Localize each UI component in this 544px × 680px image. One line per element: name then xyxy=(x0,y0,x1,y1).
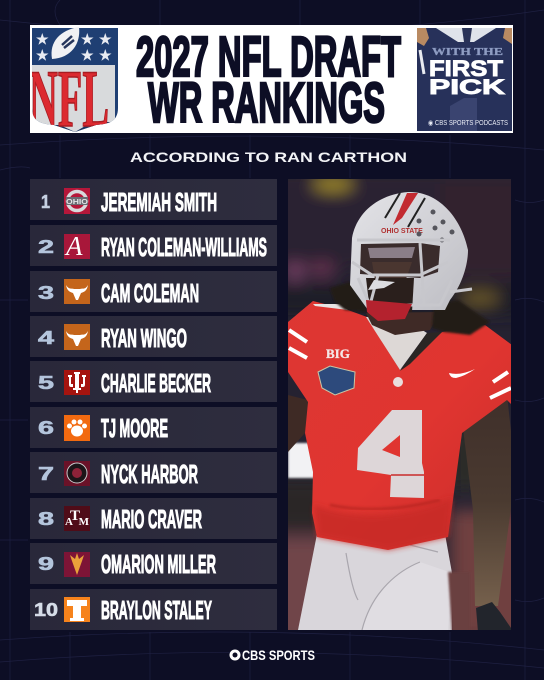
header banner xyxy=(29,25,513,144)
row 5: Charlie Becker xyxy=(30,361,277,402)
icon: NFL shield logo: ★ xyxy=(99,31,112,47)
podcast art: With the First Pick: ◉ CBS SPORTS PODCASTS xyxy=(428,120,508,127)
row 5: Charlie Becker: 5 xyxy=(38,373,54,393)
row 4: Ryan Wingo: 4 xyxy=(38,328,54,348)
icon: Indiana logo xyxy=(64,370,90,395)
row 4: Ryan Wingo xyxy=(30,316,277,357)
rankings list xyxy=(30,179,277,630)
row 1: Jeremiah Smith xyxy=(30,179,277,220)
row 9: Omarion Miller xyxy=(30,543,277,584)
dreadlocks xyxy=(330,282,490,335)
icon: Texas A&M logo: T xyxy=(70,508,80,524)
jersey patches xyxy=(318,346,475,395)
icon: Arizona State logo xyxy=(64,552,90,577)
player jersey xyxy=(288,301,512,550)
row 4: Ryan Wingo: RYAN WINGO xyxy=(101,323,187,353)
podcast art: With the First Pick: PICK xyxy=(429,76,505,99)
row 6: TJ Moore: 6 xyxy=(38,418,54,438)
row 8: Mario Craver: MARIO CRAVER xyxy=(101,504,202,534)
glove xyxy=(476,602,511,632)
footer: CBS Sports logo: CBS SPORTS xyxy=(242,648,315,663)
icon: Alabama logo xyxy=(64,231,90,261)
row 8: Mario Craver: 8 xyxy=(38,509,54,529)
title xyxy=(136,25,401,135)
helmet xyxy=(350,192,472,321)
row 3: Cam Coleman: CAM COLEMAN xyxy=(101,278,199,308)
row 1: Jeremiah Smith: 1 xyxy=(41,192,50,212)
icon: Clemson logo xyxy=(64,415,90,441)
icon: NFL shield logo: ★ xyxy=(81,31,94,47)
jersey number 4 xyxy=(357,410,424,498)
row 7: Nyck Harbor: NYCK HARBOR xyxy=(101,459,198,489)
icon: Tennessee logo xyxy=(64,597,90,622)
icon: Ohio State logo: OHIO xyxy=(66,199,89,206)
helmet: OHIO STATE xyxy=(381,228,423,235)
icon: NFL shield logo: ★ xyxy=(36,47,49,63)
icon: Texas A&M logo: A M xyxy=(65,516,90,528)
row 6: TJ Moore xyxy=(30,407,277,448)
row 1: Jeremiah Smith: JEREMIAH SMITH xyxy=(101,187,217,217)
icon: NFL shield logo: NFL xyxy=(29,53,109,144)
subtitle: ACCORDING TO RAN CARTHON xyxy=(130,149,407,165)
row 9: Omarion Miller: 9 xyxy=(38,554,54,574)
podcast art: With the First Pick xyxy=(417,28,512,131)
row 6: TJ Moore: TJ MOORE xyxy=(101,413,168,443)
icon: Texas A&M logo xyxy=(64,506,90,531)
row 2: Ryan Coleman-Williams: 2 xyxy=(38,237,54,257)
podcast art: With the First Pick: WITH THE xyxy=(432,46,503,58)
row 2: Ryan Coleman-Williams: RYAN COLEMAN-WILLIAMS xyxy=(101,232,267,262)
player arms xyxy=(288,395,512,606)
row 9: Omarion Miller: OMARION MILLER xyxy=(101,549,216,579)
icon: Texas logo xyxy=(64,279,90,304)
row 3: Cam Coleman: 3 xyxy=(38,283,54,303)
photo background crowd xyxy=(288,179,511,630)
row 3: Cam Coleman xyxy=(30,271,277,312)
podcast art: With the First Pick: FIRST xyxy=(429,56,504,81)
row 8: Mario Craver xyxy=(30,498,277,539)
undershirt and neck xyxy=(366,316,427,370)
icon: NFL shield logo: ★ xyxy=(99,47,112,63)
row 5: Charlie Becker: CHARLIE BECKER xyxy=(101,368,211,398)
row 10: Braylon Staley xyxy=(30,589,277,630)
icon: Ohio State logo xyxy=(64,188,90,214)
icon: NFL shield logo xyxy=(32,27,118,132)
row 2: Ryan Coleman-Williams xyxy=(30,225,277,266)
icon: Texas logo xyxy=(64,324,90,350)
player pants xyxy=(298,534,452,630)
row 10: Braylon Staley: 10 xyxy=(34,600,58,620)
icon: South Carolina logo xyxy=(64,461,90,486)
icon: NFL shield logo: ★ xyxy=(81,47,94,63)
row 7: Nyck Harbor: 7 xyxy=(38,464,54,484)
icon: Alabama logo: A xyxy=(64,231,83,261)
icon: NFL shield logo: ★ xyxy=(36,31,49,47)
row 7: Nyck Harbor xyxy=(30,452,277,493)
jersey patches: BIG xyxy=(326,346,350,361)
player photo xyxy=(288,179,511,630)
row 10: Braylon Staley: BRAYLON STALEY xyxy=(101,595,212,625)
